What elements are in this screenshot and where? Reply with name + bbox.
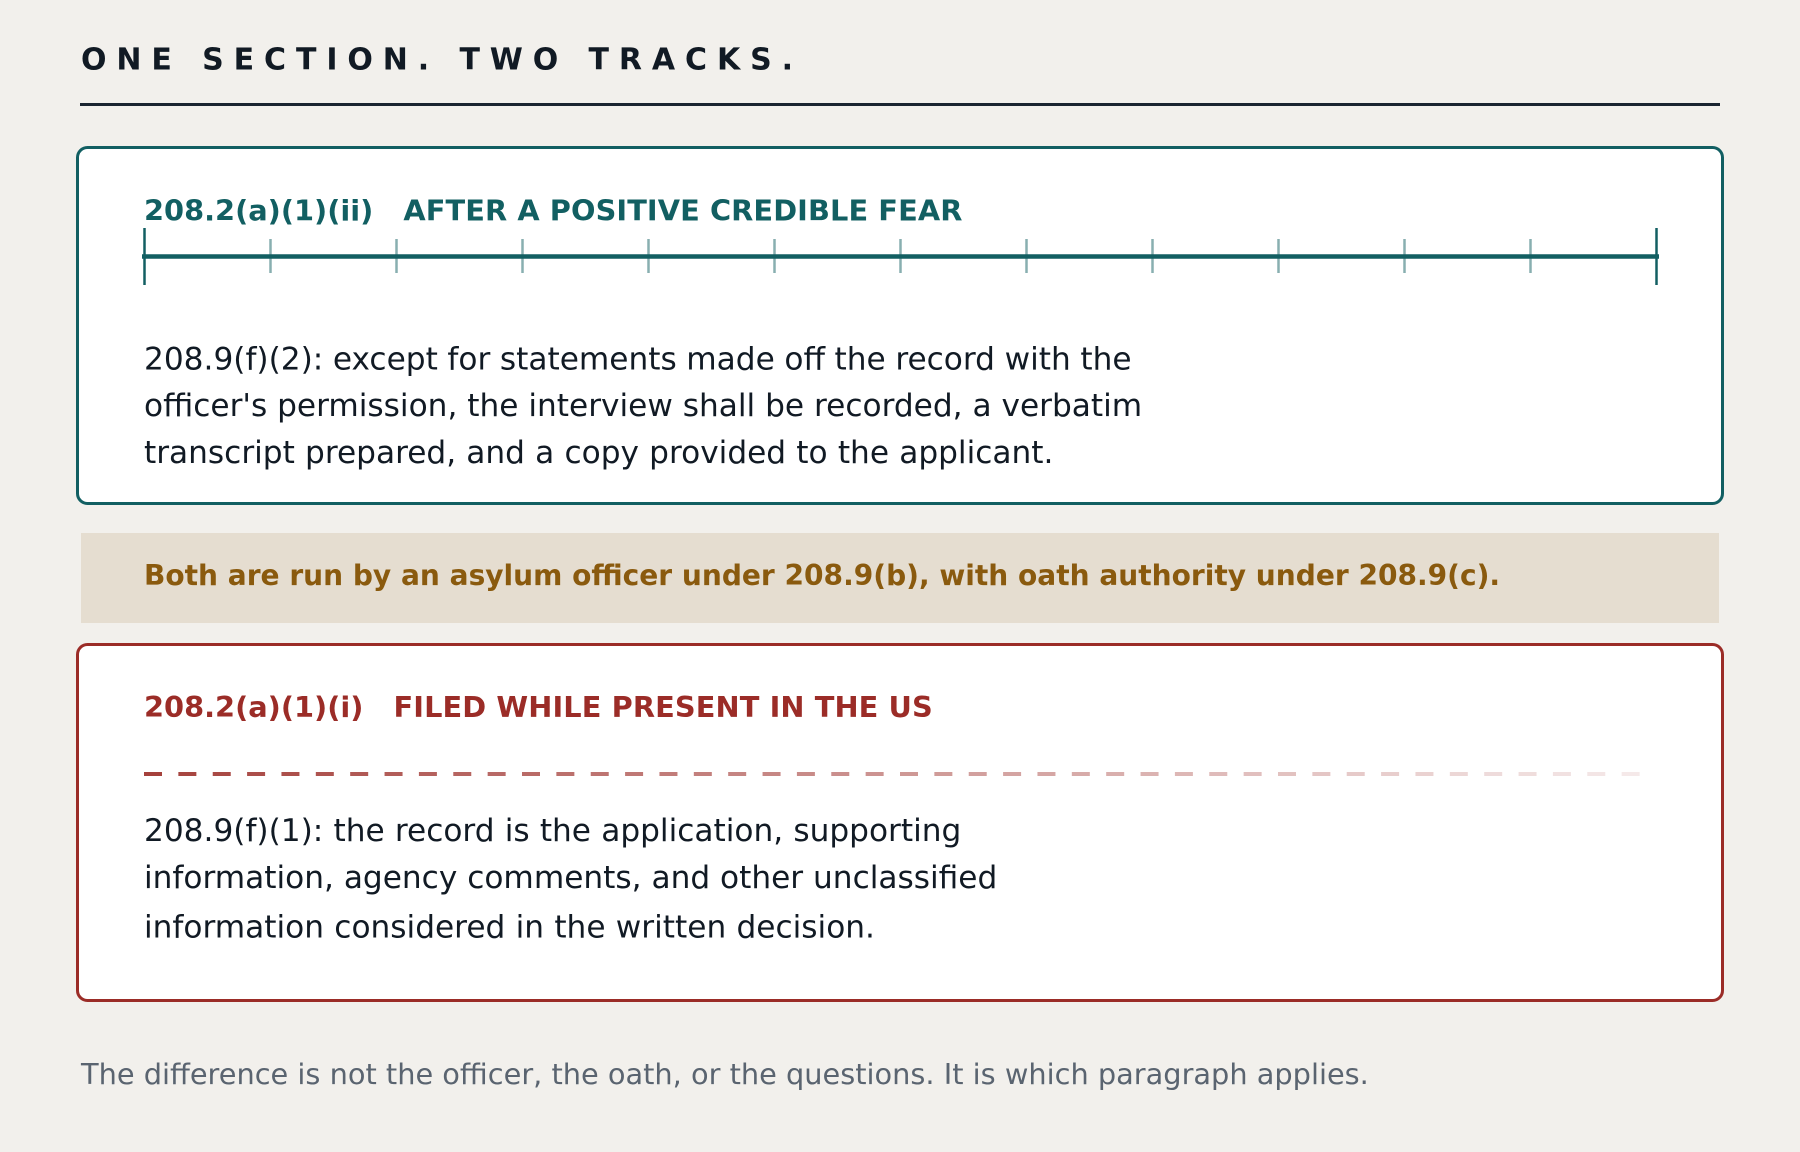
timeline: continuous with ticks (142, 228, 1659, 285)
panel heading: teal: 208.2(a)(1)(ii) AFTER A POSITIVE CREDIBLE FEAR (144, 194, 962, 228)
panel body text: 208.9(f)(1): 208.9(f)(1): the record is the application, supporting (144, 813, 961, 849)
panel body text: 208.9(f)(2): officer's permission, the interview shall be recorded, a verbatim (144, 388, 1142, 424)
panel body text: 208.9(f)(1) (144, 813, 997, 945)
panel body text: 208.9(f)(2) (144, 341, 1142, 471)
callout banner: Both are run by an asylum officer under 208.9(b), with oath authority under 208.9(c). (144, 559, 1500, 592)
panel body text: 208.9(f)(2): 208.9(f)(2): except for statements made off the record with the (144, 341, 1132, 377)
fading dashed line (144, 772, 1640, 776)
panel heading: red: 208.2(a)(1)(i) FILED WHILE PRESENT IN THE US (144, 690, 933, 724)
footer note: The difference is not the officer, the oath, or the questions. It is which paragraph applies. (80, 1057, 1369, 1091)
callout banner (81, 533, 1719, 623)
panel body text: 208.9(f)(2): transcript prepared, and a copy provided to the applicant. (144, 435, 1053, 471)
panel: after a positive credible fear (78, 148, 1722, 504)
title: ONE SECTION. TWO TRACKS. (81, 42, 803, 78)
panel body text: 208.9(f)(1): information, agency comments, and other unclassified (144, 860, 997, 896)
panel: filed while present in the US (78, 644, 1722, 1000)
panel body text: 208.9(f)(1): information considered in the written decision. (144, 909, 875, 945)
